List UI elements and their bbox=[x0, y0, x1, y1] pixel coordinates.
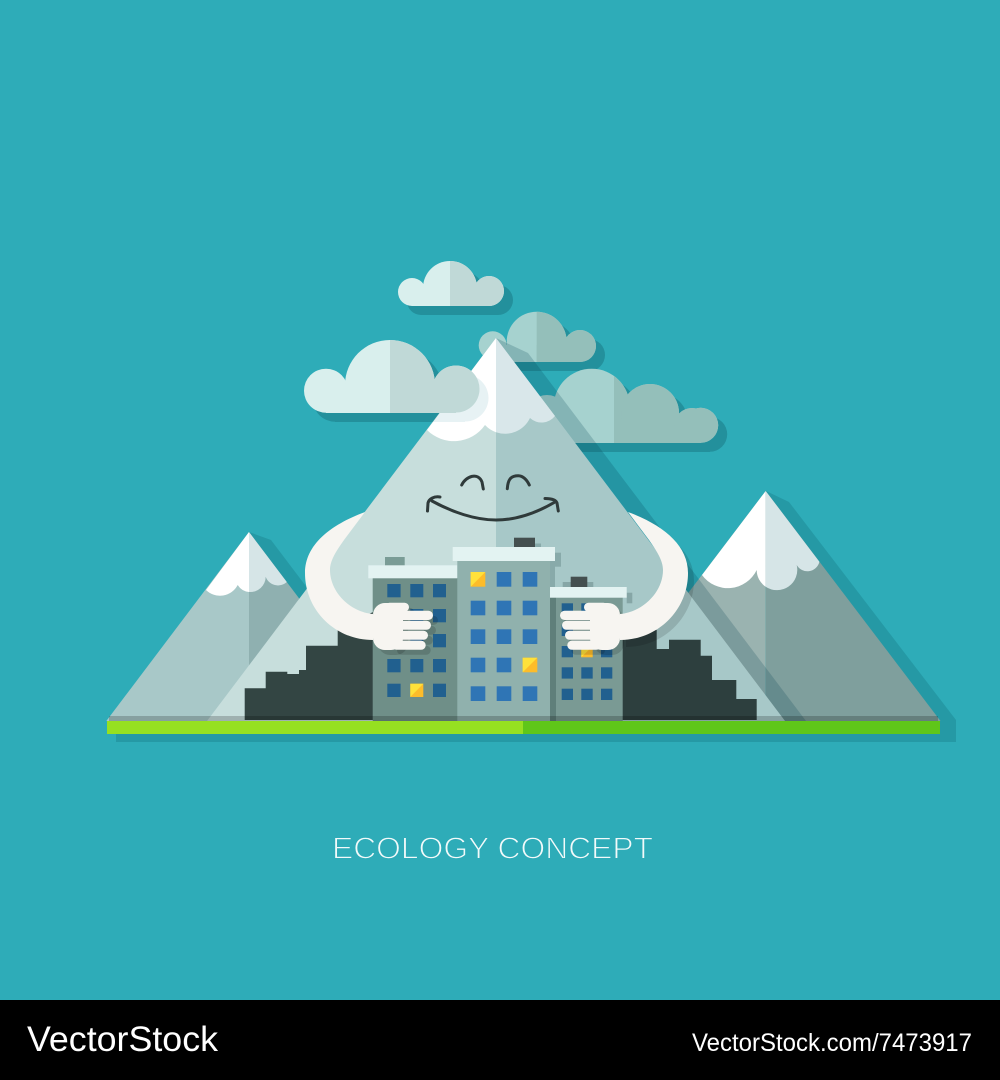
lit window top bbox=[471, 572, 485, 587]
building: right bbox=[550, 577, 632, 721]
smile bbox=[428, 497, 558, 520]
windows bbox=[471, 572, 537, 701]
right hand bbox=[560, 603, 620, 650]
chimney bbox=[571, 577, 587, 587]
lit window bbox=[410, 684, 423, 697]
cloud: top bbox=[398, 261, 513, 315]
front cloud shadow on sky bbox=[313, 349, 488, 439]
lit window bbox=[581, 646, 593, 657]
skyline left bbox=[245, 612, 380, 720]
left eye bbox=[462, 476, 483, 489]
ground shadow bbox=[116, 730, 956, 742]
roof and chimney shadows bbox=[535, 544, 561, 587]
caption: ECOLOGY CONCEPT bbox=[332, 830, 653, 866]
cloud: front left bbox=[304, 340, 480, 413]
chimney bbox=[385, 557, 405, 566]
cloud: middle behind mountain bbox=[478, 312, 605, 371]
ground bbox=[107, 716, 940, 734]
grass dark half bbox=[523, 721, 940, 734]
footer url: VectorStock.com/7473917 bbox=[692, 1029, 972, 1057]
left mountain snow bbox=[206, 532, 287, 596]
right arm shadow bbox=[626, 519, 694, 647]
footer brand: VectorStock bbox=[27, 1020, 219, 1059]
mountain face bbox=[428, 476, 558, 520]
right eye bbox=[507, 476, 529, 489]
grass light half bbox=[107, 721, 523, 734]
right mountain bbox=[591, 491, 940, 721]
ground contact band bbox=[109, 716, 938, 721]
windows bbox=[387, 584, 446, 697]
mountain shadows on sky bbox=[249, 491, 956, 742]
roof and chimney shadows bbox=[563, 582, 632, 603]
roof bbox=[550, 587, 627, 598]
main mountain cast shadow bbox=[496, 338, 806, 721]
roof bbox=[368, 565, 457, 578]
main mountain snow bbox=[427, 338, 555, 441]
right mountain snow bbox=[702, 491, 819, 590]
main mountain bbox=[207, 338, 785, 721]
left mountain bbox=[106, 532, 392, 721]
windows bbox=[562, 603, 612, 700]
cloud shadow falling on the snow bbox=[433, 378, 488, 422]
building: center bbox=[453, 538, 561, 721]
lit window lower bbox=[523, 658, 537, 672]
chimney bbox=[514, 538, 535, 547]
roof bbox=[453, 547, 555, 561]
footer bar bbox=[0, 1000, 1000, 1080]
left arm bbox=[305, 512, 373, 640]
cloud: right behind mountain bbox=[526, 369, 727, 454]
building: left bbox=[368, 557, 458, 721]
hand shadows bbox=[378, 608, 624, 655]
right arm bbox=[620, 512, 688, 640]
left hand bbox=[373, 603, 433, 650]
skyline right bbox=[615, 610, 757, 720]
